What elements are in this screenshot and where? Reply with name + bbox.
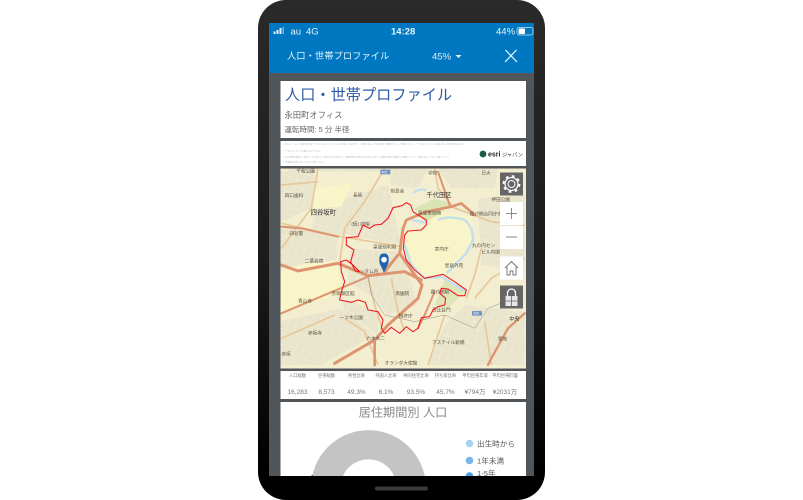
map labels: 千桜公園 <box>296 168 315 175</box>
icon: home <box>500 256 523 280</box>
map labels: 特許庁 <box>399 313 413 320</box>
panel: disclaimer and logo <box>280 141 526 166</box>
disclaimer text: この情報の利用にあたってはご注意ください。 <box>283 160 326 164</box>
map labels <box>281 168 519 366</box>
map labels: ンタム内 <box>360 268 379 275</box>
map labels: 一ツ木公園 <box>340 314 363 321</box>
legend: 出生時から <box>477 438 515 448</box>
map labels: 日大 <box>481 170 491 177</box>
stat values: ¥794万 <box>465 388 486 396</box>
water: moat <box>405 190 473 292</box>
app header bar <box>269 23 534 73</box>
map blocks <box>278 168 525 365</box>
icon: close <box>505 50 517 62</box>
disclaimer text <box>283 142 465 164</box>
icon: settings <box>500 172 523 196</box>
highway shields: 405 <box>473 312 479 316</box>
map controls <box>500 172 523 308</box>
stat values: 16,283 <box>288 389 308 396</box>
map labels: 南園院 <box>395 290 410 297</box>
map labels: 四谷警 <box>289 230 304 237</box>
drive time boundary <box>340 203 466 333</box>
status bar: 44% <box>496 26 516 38</box>
icon: lock <box>500 286 523 308</box>
stat values: 8,573 <box>318 389 335 396</box>
map labels: 赤坂御区館 <box>331 290 355 297</box>
map labels: 神田公園 <box>491 196 510 203</box>
stat values: 6.1% <box>379 389 394 396</box>
map labels: オランダ大使館 <box>385 359 418 366</box>
icon: zoom out <box>500 226 523 249</box>
map labels: 六本木二 <box>366 335 385 342</box>
map labels: 赤坂 <box>281 351 291 358</box>
stat labels: 持ち家比率 <box>435 372 457 379</box>
status bar <box>274 26 533 38</box>
icon: dropdown caret <box>456 55 462 58</box>
panel: map <box>278 168 526 368</box>
stat values: 45.7% <box>436 389 455 396</box>
stat labels: 共同住宅比率 <box>403 372 430 379</box>
map labels: 霞が関駅 <box>431 288 450 295</box>
panel: report title <box>280 81 526 138</box>
donut chart <box>312 430 425 476</box>
stat labels: 世帯総数 <box>318 372 336 379</box>
map labels: 皇居外苑 <box>445 262 464 269</box>
map labels: 二葉会病 <box>305 257 324 264</box>
office name: 永田町オフィス <box>284 110 342 120</box>
disclaimer text: データはエリアごとに集計されています。 <box>283 149 322 153</box>
status bar: 14:28 <box>391 26 415 38</box>
map labels: 前島会 <box>390 187 405 194</box>
icon: zoom in <box>500 202 523 225</box>
icon: location pin <box>379 253 389 273</box>
phone body <box>258 0 545 500</box>
panel: statistics <box>280 371 526 399</box>
stat labels: 男性比率 <box>348 372 366 379</box>
main roads <box>281 172 525 365</box>
stat values <box>288 388 518 396</box>
map labels: 四口歯科 <box>285 192 304 199</box>
rail line <box>368 277 505 328</box>
status bar: au <box>290 26 301 38</box>
drive time: 運転時間: 5 分 半径 <box>284 124 350 134</box>
legend <box>466 438 515 478</box>
disclaimer text: このレポートは、出典元の公表データをもとにプロファイルを作成したものです。ご利用にあたっては内容をご確認のうえ、ご判断ください。データはエリアごとに集計され、推計値を含みます。 <box>283 142 465 146</box>
stat values: ¥2031万 <box>493 388 518 396</box>
map labels: 中央 <box>509 315 519 322</box>
highway shields <box>380 170 482 316</box>
home indicator <box>375 486 428 490</box>
stat labels: 平均世帯年収 <box>462 372 489 379</box>
map labels: 霞が関合同庁舎 <box>470 211 503 218</box>
map labels: 日比谷門 <box>432 307 451 314</box>
map labels: ビル内閣 <box>481 248 500 255</box>
legend: 1-5年 <box>477 468 496 478</box>
stat labels <box>289 372 519 379</box>
chart title: 居住期間別 人口 <box>359 406 447 420</box>
map labels: 青山寺 <box>298 297 312 304</box>
map labels: 丸の内セン <box>472 242 496 249</box>
map labels: 皇居東御苑 <box>418 209 442 216</box>
stat labels: 平均世帯貯蓄 <box>492 372 519 379</box>
stat values: 93.5% <box>407 389 425 396</box>
legend: 1年未満 <box>477 456 504 466</box>
disclaimer text: 人口や世帯の数値は、統計データに基づいて推計された値であり、実際の値とは異なる場合があります。詳細は出典元の資料をご確認ください。利用にあたってはご注意ください。 <box>283 155 451 159</box>
status bar: 4G <box>306 26 319 38</box>
minor roads <box>281 168 525 365</box>
map labels: 宮内庁 <box>435 245 449 252</box>
stat labels: 人口総数 <box>289 372 307 379</box>
map labels: 長延 <box>353 192 363 199</box>
stat labels: 外国人比率 <box>375 372 397 379</box>
logo: esri japan: esri <box>488 152 501 158</box>
logo: esri japan: ジャパン <box>502 151 523 158</box>
header title: 人口・世帯プロファイル <box>287 50 389 61</box>
panel: residence duration chart <box>280 402 526 478</box>
map labels: 学校 <box>428 170 438 177</box>
logo: esri japan <box>480 151 523 158</box>
map labels: 千代田区 <box>426 190 452 199</box>
title: 人口・世帯プロファイル <box>285 87 452 104</box>
zoom level: 45% <box>432 52 452 62</box>
phone screen <box>269 23 534 478</box>
highway shields: 405 <box>382 170 387 174</box>
map labels: 四谷坂町 <box>311 207 337 216</box>
stat values: 49.3% <box>347 389 366 396</box>
map labels: 築地 <box>498 336 508 343</box>
parks <box>300 199 344 266</box>
map labels: 赤坂寺 <box>308 330 322 337</box>
map labels: 皇居前利用 <box>373 243 397 250</box>
map labels: (仮) 四階 <box>351 221 370 228</box>
map labels: アステイル新橋 <box>432 339 465 346</box>
